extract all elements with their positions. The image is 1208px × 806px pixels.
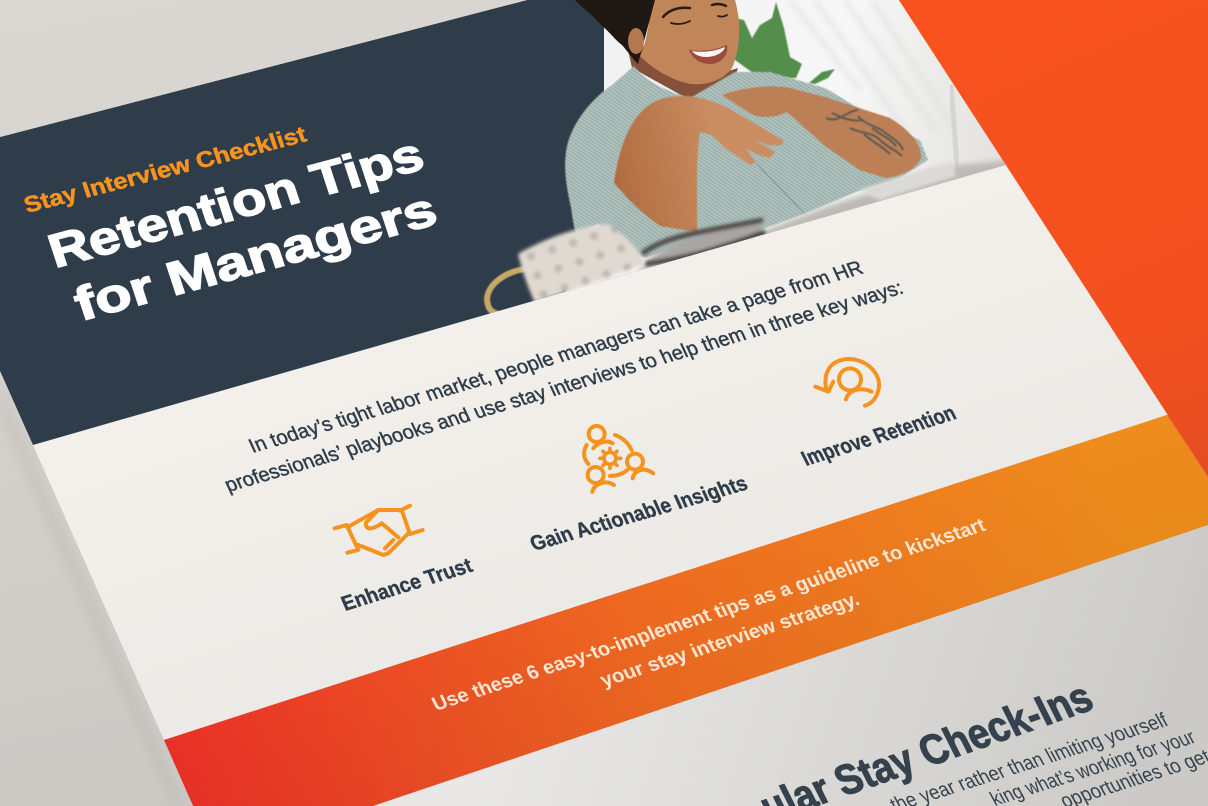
laptop screen edge: [951, 85, 958, 176]
call-out text: your stay interview strategy.: [597, 589, 863, 692]
eyebrow: Stay Interview Checklist: Stay Interview Checklist: [21, 121, 310, 218]
icon: handshake: [335, 506, 423, 555]
panel: gradient call-out band: [164, 415, 1208, 806]
face: [640, 0, 739, 84]
title: Retention Tips for Managers: Retention Tips: [42, 127, 430, 278]
intro paragraph: In today’s tight labor market, people managers can take a page from HR: [245, 257, 867, 458]
label: Improve Retention: Improve Retention: [798, 401, 960, 471]
title: Retention Tips for Managers: [47, 146, 436, 320]
title: Retention Tips for Managers: for Managers: [68, 182, 443, 331]
page shadow: [0, 380, 186, 806]
shirt placket: [756, 163, 804, 213]
glasses: [642, 220, 765, 266]
icon: team with gear: [584, 426, 653, 492]
desk: [637, 158, 1006, 271]
mug handle: [487, 268, 532, 314]
background: orange surface: [880, 0, 1208, 500]
label: Gain Actionable Insights: Gain Actionable Insights: [526, 472, 751, 556]
smile: [689, 45, 727, 64]
panel: dark header: [0, 0, 640, 445]
label: Enhance Trust: Enhance Trust: [338, 555, 476, 616]
photo: smiling woman at a desk: [487, 0, 1010, 320]
plant: [734, 2, 836, 84]
neck: [628, 45, 738, 100]
panel: lower grey section: [374, 568, 1088, 806]
hair: [575, 0, 655, 64]
papers on desk: [859, 162, 956, 200]
near arm and hand: [614, 96, 783, 232]
shirt: [565, 66, 928, 258]
eyebrows and eyes: [663, 4, 727, 24]
call-out text: Use these 6 easy-to-implement tips as a guideline to kickstart: [429, 515, 990, 716]
ear: [628, 28, 644, 54]
mug: [518, 224, 645, 303]
intro paragraph: professionals’ playbooks and use stay interviews to help them in three key ways:: [221, 277, 907, 497]
icon: person with circular arrow: [815, 359, 879, 406]
tattoo: [826, 110, 903, 156]
panel: cream introduction: [33, 165, 1208, 740]
wall: [566, 0, 1006, 292]
far forearm and hand: [722, 86, 921, 178]
